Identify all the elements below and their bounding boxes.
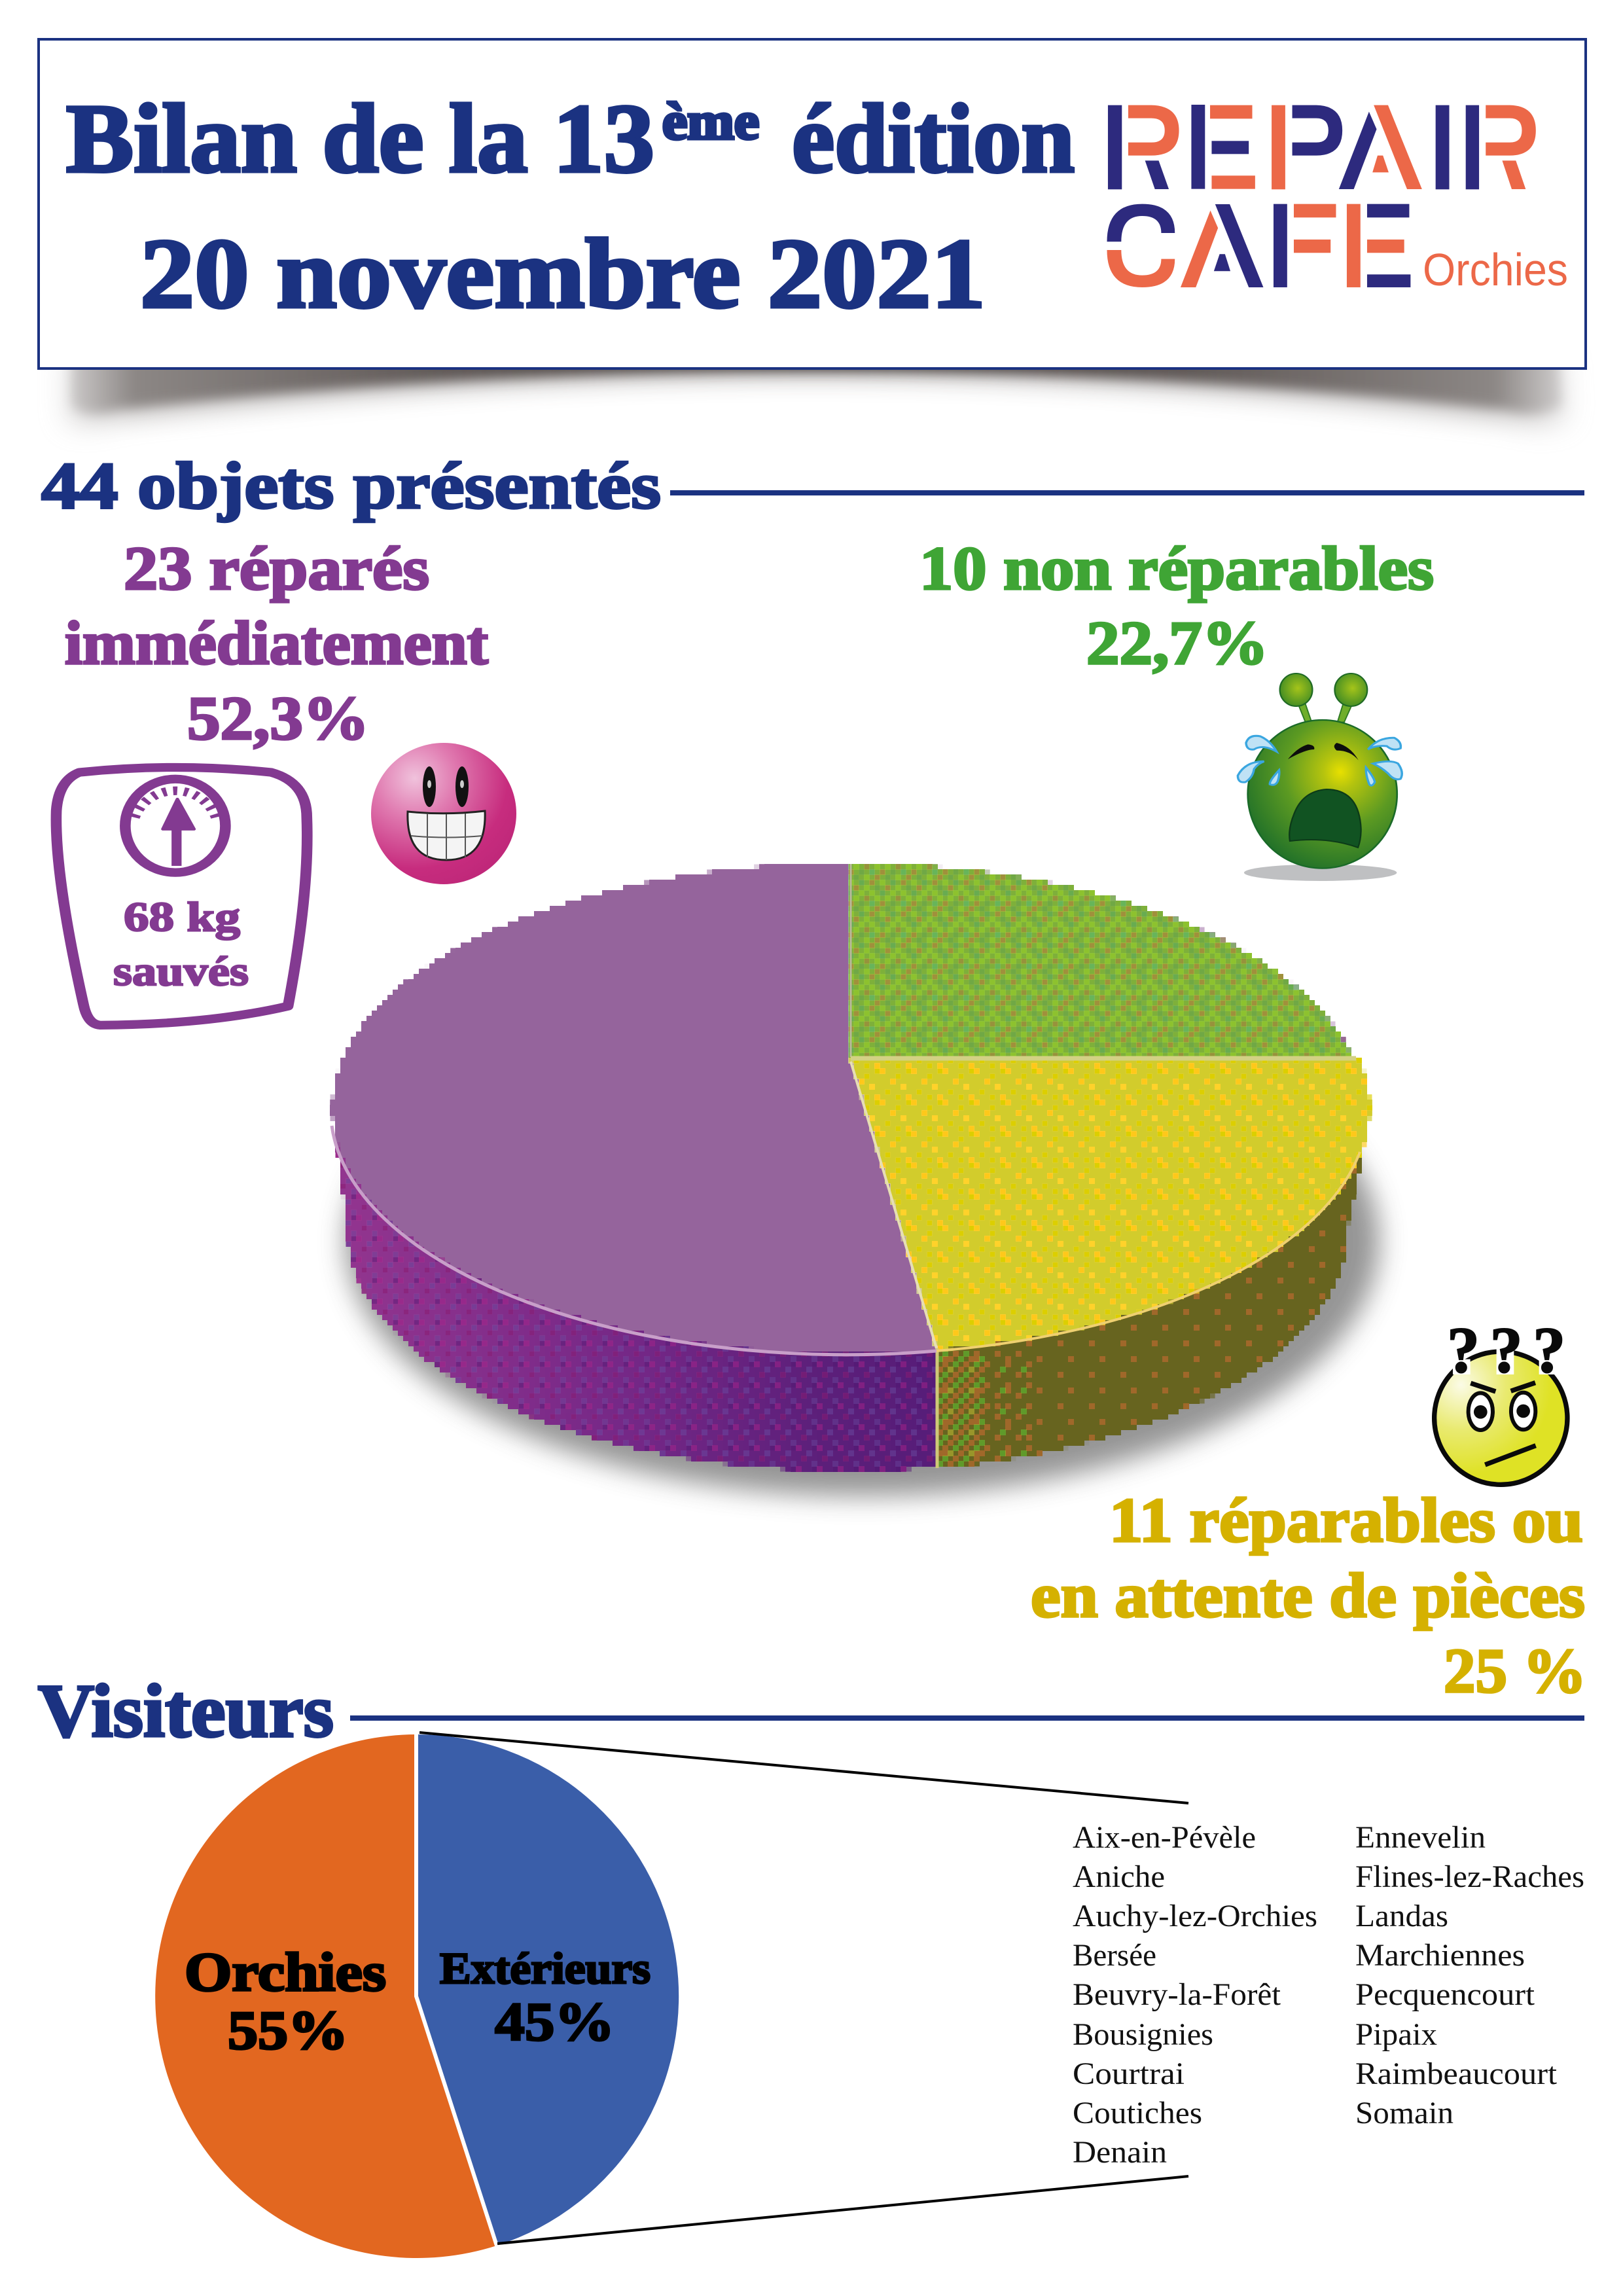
list: communes column 1: Beuvry-la-Forêt: [1073, 1977, 1281, 2012]
title line 1: édition: [792, 84, 1075, 193]
list: communes column 2: Somain: [1355, 2096, 1454, 2130]
label: 10 non réparables 22,7%: 22,7%: [1086, 609, 1268, 677]
label: Orchies 55%: 55%: [228, 2000, 348, 2061]
label: 10 non réparables 22,7%: [919, 535, 1434, 677]
question marks: ?: [1447, 1314, 1480, 1386]
text: 68 kg sauvés: 68 kg: [124, 893, 240, 940]
label: 23 réparés immédiatement 52,3%: [65, 535, 488, 753]
list: communes column 1: Denain: [1073, 2135, 1167, 2170]
label: 23 réparés immédiatement 52,3%: 52,3%: [187, 685, 369, 753]
heading: Visiteurs: Visiteurs: [38, 1670, 334, 1753]
icon: crying green alien: [1238, 673, 1402, 881]
pie seams: [332, 864, 1360, 1468]
question marks: ?: [1533, 1314, 1565, 1386]
question marks: ?: [1490, 1314, 1523, 1386]
list: communes column 1: Bousignies: [1073, 2017, 1213, 2052]
heading: 44 objets présentés: 44 objets présentés: [41, 449, 661, 523]
label: 23 réparés immédiatement 52,3%: 23 réparés: [124, 535, 429, 603]
label: Extérieurs 45%: [440, 1943, 651, 2053]
list: communes column 2: Marchiennes: [1355, 1938, 1525, 1973]
list: communes column 1: Aix-en-Pévèle: [1073, 1820, 1256, 1855]
text: 68 kg sauvés: sauvés: [113, 948, 249, 994]
icon: pink grinning smiley: [371, 743, 516, 884]
list: communes column 2: Flines-lez-Raches: [1355, 1859, 1584, 1894]
list: communes column 2: Landas: [1355, 1899, 1448, 1933]
list: communes column 1: Auchy-lez-Orchies: [1073, 1899, 1317, 1933]
list: communes column 1: [1073, 1820, 1317, 2170]
list: communes column 1: Coutiches: [1073, 2096, 1202, 2130]
label: 11 réparables ou en attente de pièces 25 %: 11 réparables ou: [1109, 1485, 1583, 1555]
slice: Orchies 55%: [155, 1734, 497, 2258]
label: Extérieurs 45%: Extérieurs: [440, 1943, 651, 1993]
list: communes column 2: Ennevelin: [1355, 1820, 1486, 1855]
logo: Repair Café Orchies: Orchies: [1423, 244, 1568, 295]
title line 2: 20 novembre 2021: [140, 219, 986, 329]
pie chart: visiteurs: [155, 1734, 679, 2258]
question marks: [1447, 1314, 1565, 1386]
text: 68 kg sauvés: [113, 893, 249, 994]
icon: puzzled yellow smiley with question marks: [1435, 1314, 1567, 1484]
label: 11 réparables ou en attente de pièces 25 %: [1031, 1485, 1586, 1706]
slice: Extérieurs 45%: [416, 1734, 679, 2246]
header shadow swoosh: [65, 353, 1567, 425]
heading: Visiteurs: [38, 1670, 1584, 1753]
logo: Repair Café Orchies: [1107, 105, 1568, 295]
list: communes column 2: Raimbeaucourt: [1355, 2056, 1558, 2091]
list: communes column 1: Bersée: [1073, 1938, 1156, 1973]
list: communes column 2: [1355, 1820, 1584, 2130]
list: communes column 2: Pipaix: [1355, 2017, 1437, 2052]
list: communes column 1: Aniche: [1073, 1859, 1165, 1894]
list: communes column 1: Courtrai: [1073, 2056, 1185, 2091]
3D pie chart: objets: [332, 863, 1380, 1496]
label: Orchies 55%: Orchies: [185, 1942, 386, 2003]
title line 1: ème: [662, 93, 759, 151]
heading: 44 objets présentés: [41, 449, 1584, 523]
label: 23 réparés immédiatement 52,3%: immédiatement: [65, 609, 488, 677]
pixelated pie body: [332, 863, 1370, 1475]
label: 11 réparables ou en attente de pièces 25 %: 25 %: [1444, 1636, 1586, 1706]
title line 1: Bilan de la 13: [66, 84, 654, 193]
list: communes column 2: Pecquencourt: [1355, 1977, 1535, 2012]
label: 10 non réparables 22,7%: 10 non réparables: [919, 535, 1434, 603]
label: 11 réparables ou en attente de pièces 25 %: en attente de pièces: [1031, 1560, 1585, 1630]
icon: weighing scale with 68 kg sauvés: [56, 767, 307, 1025]
connector lines: [419, 1732, 1188, 2244]
header panel: [39, 39, 1586, 368]
label: Orchies 55%: [185, 1942, 386, 2061]
label: Extérieurs 45%: 45%: [495, 1992, 615, 2053]
